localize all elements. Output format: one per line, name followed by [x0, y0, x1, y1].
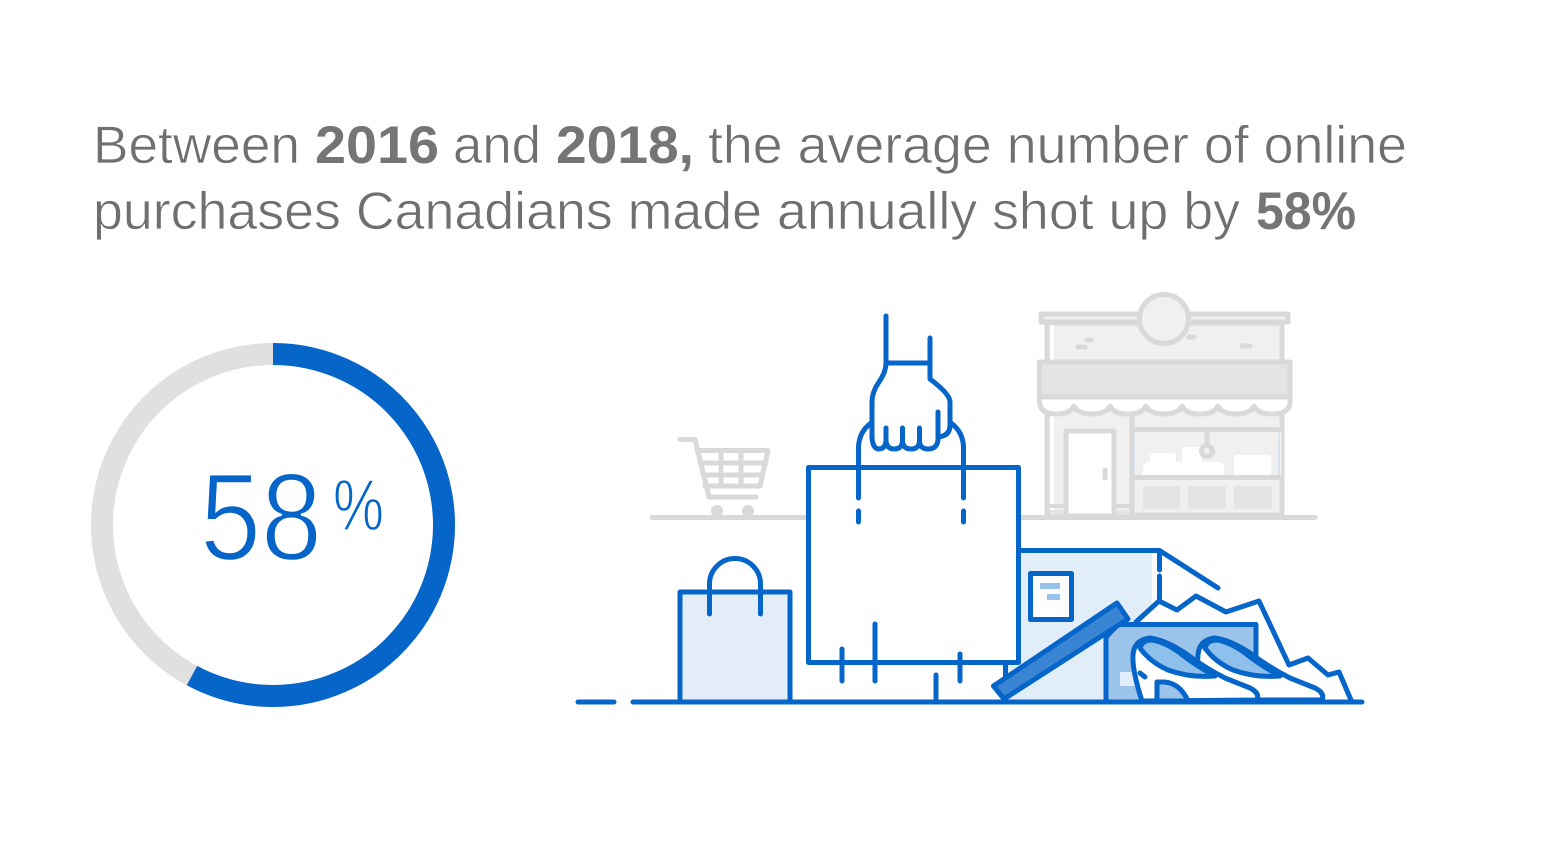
- box label: [1030, 574, 1072, 620]
- donut value: 58: [200, 449, 322, 587]
- icon: large shopping bag held by hand: [808, 316, 1018, 681]
- box lid: [994, 603, 1128, 699]
- bag handles: [858, 423, 964, 522]
- lower panels: [1143, 486, 1180, 509]
- icon: storefront: [1040, 294, 1290, 516]
- icon: shopping cart: [680, 440, 768, 517]
- title: the average number of online: [708, 116, 1407, 175]
- title: 58%: [1256, 182, 1356, 241]
- donut chart: 58%: [102, 354, 444, 696]
- awning: [1040, 362, 1290, 397]
- title: 2018,: [556, 116, 694, 175]
- donut percent sign: %: [333, 466, 384, 546]
- pendant lamp: [1204, 432, 1210, 445]
- icon: pair of shoes: [1133, 638, 1323, 701]
- front shoe: [1133, 638, 1258, 701]
- title: 2016: [315, 116, 439, 175]
- cornice: [1041, 314, 1288, 322]
- title: [93, 116, 1407, 241]
- window goods: [1143, 447, 1224, 475]
- inner box: [1106, 624, 1256, 702]
- icon: cardboard box: [994, 550, 1351, 702]
- title: and: [453, 116, 541, 175]
- back shoe: [1198, 638, 1323, 700]
- wrapping paper: [1136, 596, 1351, 700]
- ground line: [578, 675, 1362, 702]
- store wall: [1047, 323, 1282, 515]
- title: purchases Canadians made annually shot up by: [93, 182, 1241, 241]
- icon: small shopping bag: [680, 559, 790, 702]
- bag bottom ticks: [842, 624, 960, 681]
- title: Between: [93, 116, 300, 175]
- shop window: [1132, 432, 1282, 477]
- door: [1066, 431, 1114, 516]
- store sign circle: [1140, 294, 1188, 344]
- hand: [886, 316, 950, 437]
- gray ground line: [652, 515, 1315, 520]
